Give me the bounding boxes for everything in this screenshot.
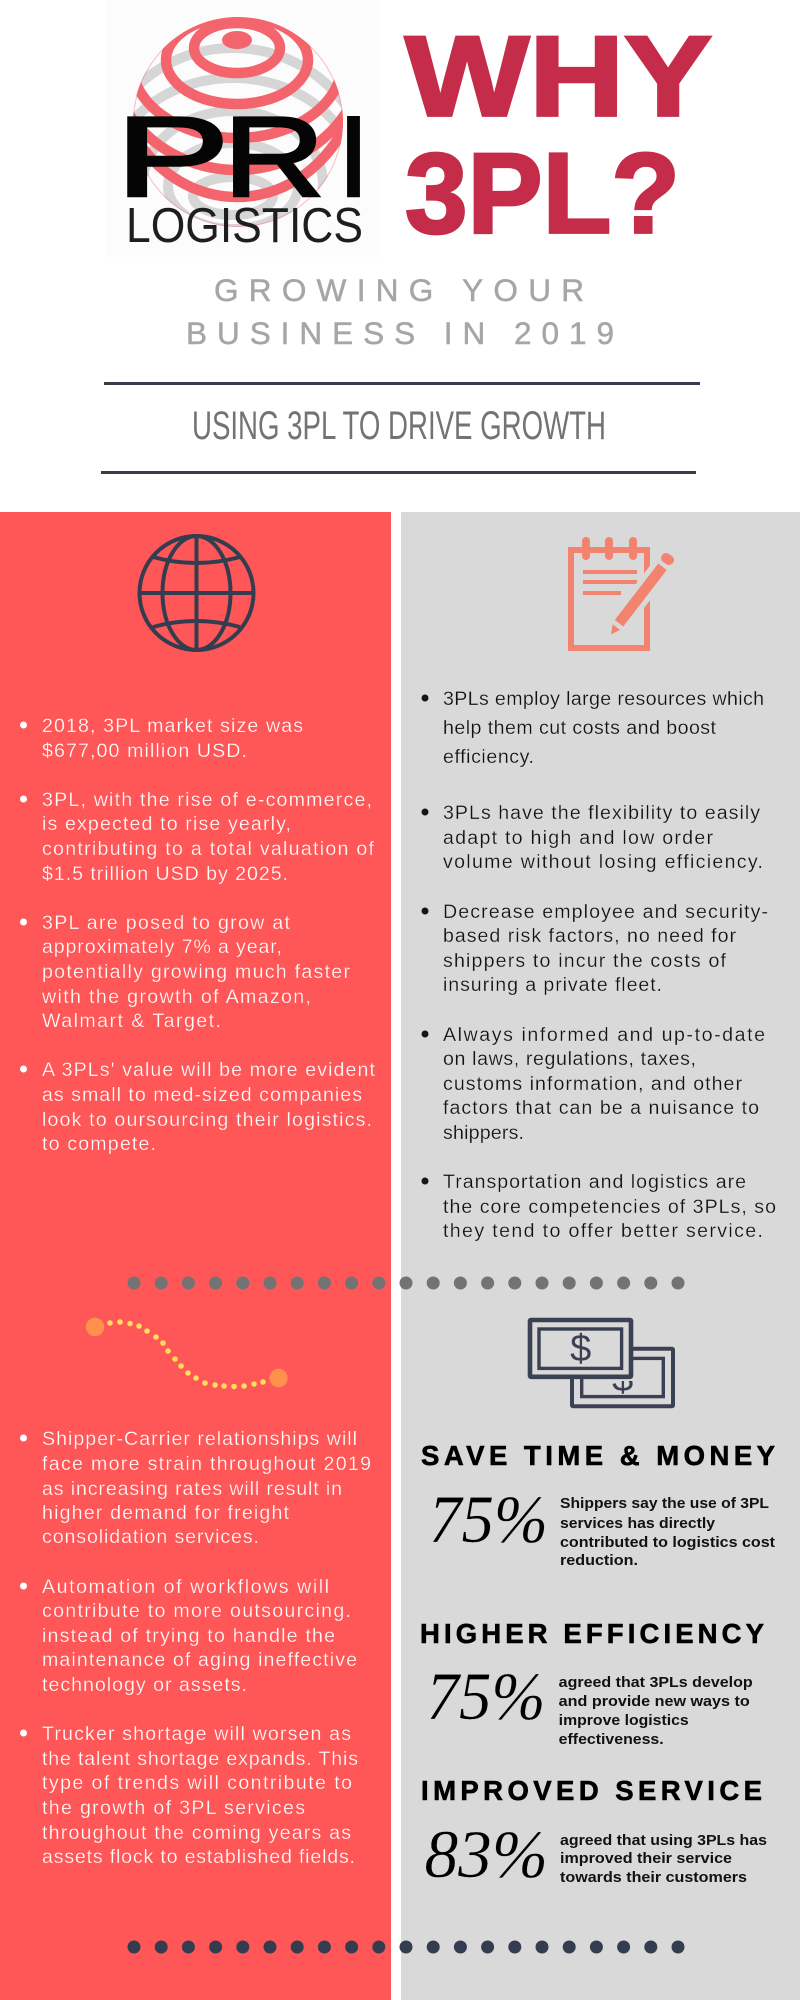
text: market facts: as small to med-sized companies (42, 1084, 362, 1106)
text: 3PL advantages: 3PLs have the flexibility to easily (443, 802, 760, 824)
text: 2019 trends: the growth of 3PL services (42, 1797, 305, 1819)
title: WHY (405, 14, 712, 140)
text: 2019 trends: Automation of workflows will (42, 1576, 329, 1598)
text: 2019 trends: the talent shortage expands. This (42, 1748, 358, 1770)
stat: higher efficiency: HIGHER EFFICIENCY (420, 1618, 764, 1649)
text: 3PL advantages: insuring a private fleet. (443, 974, 662, 996)
stat: higher efficiency: agreed that 3PLs develop (559, 1674, 753, 1691)
text: 2019 trends: contribute to more outsourcing. (42, 1600, 351, 1622)
text: 2019 trends: maintenance of aging ineffective (42, 1649, 357, 1671)
icon: banknotes: $ (570, 1328, 591, 1370)
text: market facts: $677,00 million USD. (42, 740, 247, 762)
text: 2019 trends: assets flock to established fields. (42, 1846, 355, 1868)
text: 3PL advantages: 3PLs employ large resources which (443, 688, 764, 710)
text: 2019 trends: higher demand for freight (42, 1502, 290, 1524)
text: 3PL advantages: the core competencies of 3PLs, so (443, 1196, 776, 1218)
heading band: using 3PL (101, 382, 700, 474)
title: 3PL? (405, 130, 680, 258)
text: market facts: 3PL are posed to grow at (42, 912, 291, 934)
logo: PRI Logistics: R (223, 94, 325, 221)
text: market facts: look to oursourcing their logistics. (42, 1109, 372, 1131)
text: 3PL advantages (422, 688, 776, 1242)
text: 3PL advantages: shippers. (443, 1122, 524, 1144)
text: market facts: approximately 7% a year, (42, 936, 282, 958)
text: 3PL advantages: based risk factors, no need for (443, 925, 736, 947)
stat: improved service: agreed that using 3PLs has (560, 1832, 767, 1849)
text: 3PL advantages: shippers to incur the costs of (443, 950, 727, 972)
title (405, 14, 712, 258)
stat: save time and money (421, 1440, 775, 1569)
text: 3PL advantages: factors that can be a nuisance to (443, 1097, 759, 1119)
text: market facts: contributing to a total valuation of (42, 838, 375, 860)
text: 2019 trends: as increasing rates will result in (42, 1478, 342, 1500)
stat: save time and money: contributed to logistics cost (560, 1534, 775, 1551)
text: 3PL advantages: they tend to offer better service. (443, 1220, 763, 1242)
text: market facts: to compete. (42, 1133, 156, 1155)
panel: market growth (red) (0, 512, 391, 2000)
stat: higher efficiency: 75% (426, 1658, 546, 1734)
stat: higher efficiency: and provide new ways to (559, 1693, 750, 1710)
text: 3PL advantages: customs information, and other (443, 1073, 742, 1095)
logo: PRI Logistics: I (338, 94, 369, 221)
text: 2019 trends (20, 1428, 371, 1868)
stat: improved service: 83% (424, 1816, 548, 1892)
dotted separator: middle (128, 1276, 684, 1290)
text: market facts: 3PL, with the rise of e-commerce, (42, 789, 372, 811)
text: 3PL advantages: Always informed and up-to-date (443, 1024, 765, 1046)
text: market facts: is expected to rise yearly, (42, 813, 291, 835)
subtitle: GROWING YOUR (214, 272, 584, 308)
text: market facts: Walmart & Target. (42, 1010, 221, 1032)
stat: improved service: towards their customers (560, 1869, 747, 1886)
heading band: using 3PL: USING 3PL TO DRIVE GROWTH (192, 404, 606, 448)
text: 3PL advantages: volume without losing efficiency. (443, 851, 763, 873)
text: 2019 trends: technology or assets. (42, 1674, 247, 1696)
text: market facts: potentially growing much faster (42, 961, 350, 983)
text: 3PL advantages: Transportation and logistics are (443, 1171, 746, 1193)
subtitle: BUSINESS IN 2019 (186, 315, 614, 351)
stat: save time and money: SAVE TIME & MONEY (421, 1440, 775, 1471)
stat: improved service (421, 1775, 767, 1892)
text: 3PL advantages: on laws, regulations, taxes, (443, 1048, 696, 1070)
text: 3PL advantages: help them cut costs and boost (443, 717, 717, 739)
stat: higher efficiency (420, 1618, 764, 1748)
icon: banknotes: $ (612, 1358, 633, 1400)
text: 2019 trends: instead of trying to handle the (42, 1625, 335, 1647)
icon: notepad and pen (571, 541, 669, 648)
icon: banknotes (530, 1320, 673, 1406)
stat: higher efficiency: improve logistics (559, 1712, 689, 1729)
text: market facts: A 3PLs' value will be more evident (42, 1059, 376, 1081)
stat: save time and money: reduction. (560, 1552, 638, 1569)
dotted separator: bottom (128, 1940, 684, 1954)
text: 2019 trends: type of trends will contribute to (42, 1772, 352, 1794)
stat: improved service: IMPROVED SERVICE (421, 1775, 762, 1806)
text: 2019 trends: face more strain throughout 2019 (42, 1453, 371, 1475)
text: 2019 trends: Shipper-Carrier relationships will (42, 1428, 357, 1450)
text: 3PL advantages: adapt to high and low order (443, 827, 713, 849)
icon: dotted route (86, 1318, 288, 1389)
text: market facts: with the growth of Amazon, (41, 986, 311, 1008)
text: 3PL advantages: efficiency. (443, 746, 534, 768)
text: 2019 trends: throughout the coming years as (42, 1822, 351, 1844)
text: market facts: 2018, 3PL market size was (42, 715, 303, 737)
icon: globe (140, 536, 254, 650)
logo: PRI Logistics: LOGISTICS (126, 199, 363, 253)
stat: save time and money: Shippers say the use of 3PL (560, 1495, 769, 1512)
stat: save time and money: 75% (429, 1481, 548, 1557)
stat: improved service: improved their service (560, 1850, 732, 1867)
text: 2019 trends: consolidation services. (42, 1526, 259, 1548)
stat: higher efficiency: effectiveness. (559, 1731, 664, 1748)
logo: PRI Logistics (127, 17, 361, 242)
text: market facts (20, 715, 376, 1155)
subtitle (186, 272, 614, 351)
panel: 3PL benefits (gray) (401, 512, 800, 2000)
text: 2019 trends: Trucker shortage will worsen as (42, 1723, 351, 1745)
logo: PRI Logistics: P (115, 94, 230, 221)
text: market facts: $1.5 trillion USD by 2025. (42, 863, 288, 885)
text: 3PL advantages: Decrease employee and security- (443, 901, 768, 923)
stat: save time and money: services has directly (560, 1515, 716, 1532)
